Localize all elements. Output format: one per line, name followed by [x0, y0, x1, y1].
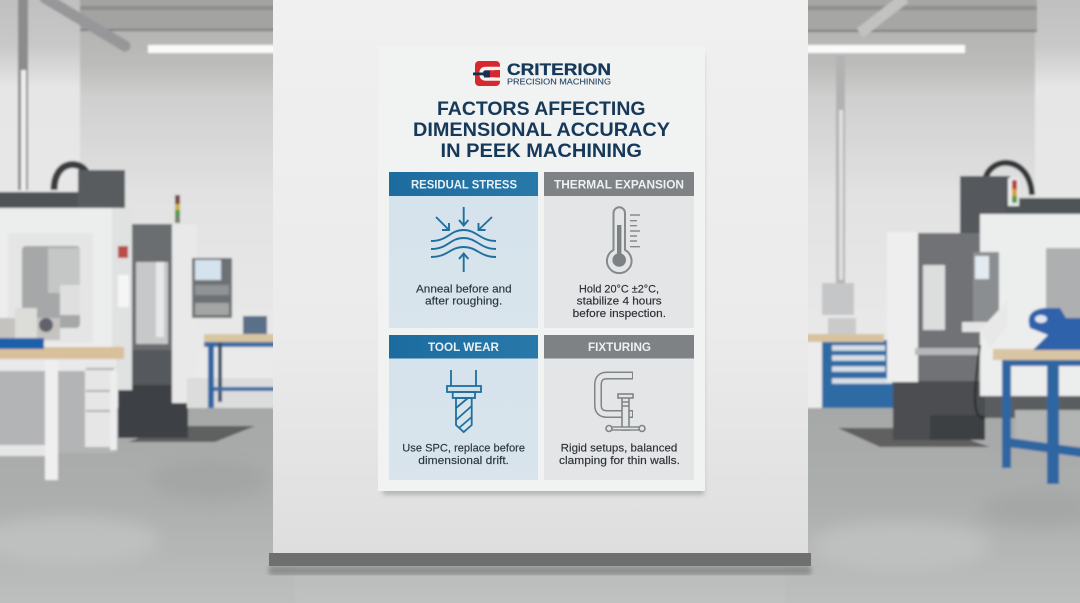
- panel: tool wear: [389, 335, 538, 480]
- panel: fixturing: clamping for thin walls.: [559, 455, 680, 467]
- icon: thermometer: [607, 207, 640, 273]
- logo: Criterion Precision Machining: [473, 60, 611, 86]
- floor: [0, 400, 1080, 603]
- poster: [378, 46, 705, 495]
- background: central wall: [273, 0, 808, 554]
- panel: residual stress: Anneal before and: [416, 284, 512, 296]
- panel: fixturing: FIXTURING: [588, 340, 651, 354]
- title: IN PEEK MACHINING: [440, 140, 642, 162]
- panel: tool wear: dimensional drift.: [418, 455, 509, 467]
- logo: Criterion Precision Machining: PRECISION MACHINING: [507, 76, 611, 86]
- panel: fixturing: [544, 335, 694, 480]
- panel: thermal expansion: THERMAL EXPANSION: [554, 177, 684, 191]
- logo: Criterion Precision Machining: CRITERION: [507, 60, 611, 79]
- panel: tool wear: Use SPC, replace before: [402, 443, 525, 455]
- panel: fixturing: Rigid setups, balanced: [561, 443, 677, 455]
- title: FACTORS AFFECTING: [437, 98, 646, 120]
- title: DIMENSIONAL ACCURACY: [413, 119, 670, 141]
- panel: residual stress: [389, 172, 538, 328]
- background: machine shop right side: [785, 0, 1080, 603]
- panel: residual stress: after roughing.: [425, 296, 502, 308]
- icon: end mill: [447, 370, 481, 432]
- panel: tool wear: TOOL WEAR: [428, 340, 499, 354]
- panel: residual stress: RESIDUAL STRESS: [411, 177, 517, 191]
- icon: C-clamp: [598, 376, 645, 432]
- panel: thermal expansion: [544, 172, 694, 328]
- panel: thermal expansion: Hold 20°C ±2°C,: [579, 284, 659, 296]
- panel: thermal expansion: before inspection.: [573, 308, 666, 320]
- background: machine shop left side: [0, 0, 295, 603]
- baseboard: [269, 553, 811, 575]
- title: [413, 98, 670, 162]
- panel: thermal expansion: stabilize 4 hours: [577, 296, 662, 308]
- icon: compressed wavy layers with arrows: [431, 207, 496, 272]
